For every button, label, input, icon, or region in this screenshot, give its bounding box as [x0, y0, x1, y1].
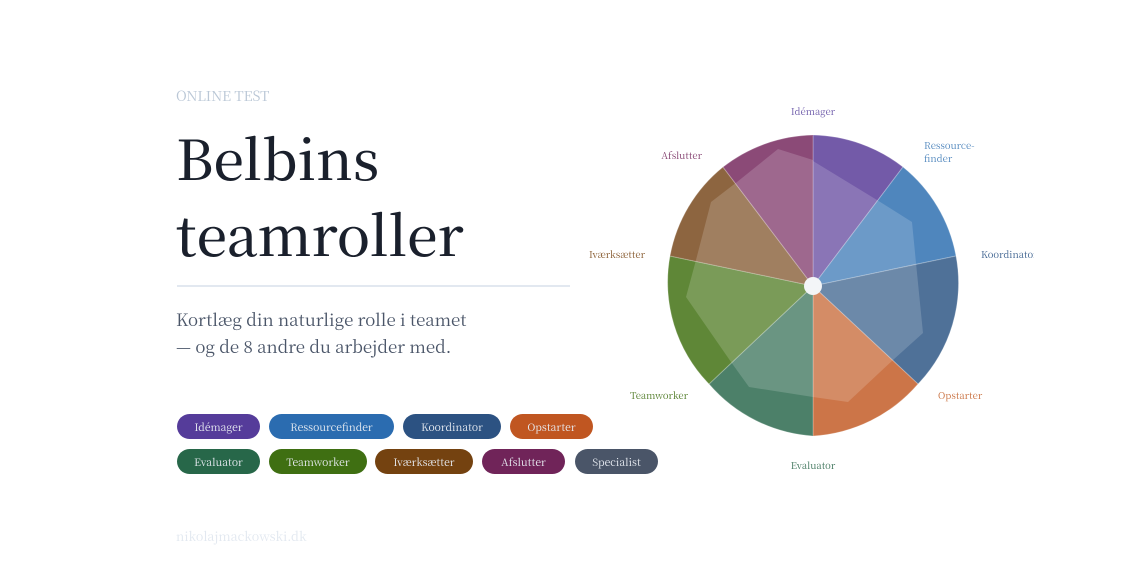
pill: Idémager: [177, 414, 260, 439]
sector: Opstarter: [813, 286, 918, 436]
sector: Iværksætter: [670, 167, 813, 286]
label: Iværksætter: Iværksætter: [589, 247, 646, 261]
title: teamroller: [176, 193, 464, 272]
sector: Evaluator: [709, 286, 813, 436]
wheel labels: [589, 104, 1038, 472]
wheel sectors: [668, 135, 959, 436]
pill: Teamworker: [269, 449, 367, 474]
label: Teamworker: Teamworker: [630, 388, 689, 402]
role pills: [177, 414, 658, 474]
sector: Afslutter: [723, 135, 813, 286]
pill: Koordinator: [403, 414, 501, 439]
label: Opstarter: Opstarter: [938, 388, 983, 402]
sector: Idémager: [813, 135, 903, 286]
pill: Koordinator: Koordinator: [421, 419, 483, 434]
pill: Afslutter: [482, 449, 565, 474]
pill: Specialist: Specialist: [592, 454, 641, 469]
sector: Koordinator: [813, 256, 959, 384]
subtitle: Kortlæg din naturlige rolle i teamet: [176, 307, 466, 331]
eyebrow: online test: ONLINE TEST: [176, 86, 269, 106]
sector: Ressourcefinder: [813, 167, 956, 286]
pill: Opstarter: Opstarter: [527, 419, 576, 434]
pill: Specialist: [575, 449, 658, 474]
title: Belbins: [176, 117, 379, 196]
pill: Idémager: Idémager: [194, 419, 243, 434]
pill: Iværksætter: [375, 449, 473, 474]
center dot: [804, 277, 822, 295]
sector: Teamworker: [668, 256, 813, 384]
subtitle: [176, 307, 466, 358]
role wheel chart: [589, 104, 1034, 472]
pill: Ressourcefinder: [269, 414, 394, 439]
pill: Ressourcefinder: Ressourcefinder: [290, 419, 373, 434]
pill: Teamworker: Teamworker: [286, 454, 350, 469]
inner score polygon: [686, 149, 923, 402]
pill: Evaluator: [177, 449, 260, 474]
pill: Evaluator: Evaluator: [194, 454, 243, 469]
label: Idémager: Idémager: [791, 104, 836, 118]
divider: [177, 285, 570, 287]
label: Afslutter: Afslutter: [661, 148, 703, 162]
title: [176, 117, 464, 272]
website footer: nikolajmackowski.dk: [176, 526, 307, 545]
pill: Afslutter: Afslutter: [501, 454, 546, 469]
label: Ressourcefinder: finder: [924, 151, 953, 165]
label: Ressourcefinder: Ressource-: [924, 138, 975, 152]
pill: Iværksætter: Iværksætter: [393, 454, 455, 469]
pill: Opstarter: [510, 414, 593, 439]
label: Evaluator: Evaluator: [791, 458, 836, 472]
subtitle: — og de 8 andre du arbejder med.: [176, 334, 451, 358]
